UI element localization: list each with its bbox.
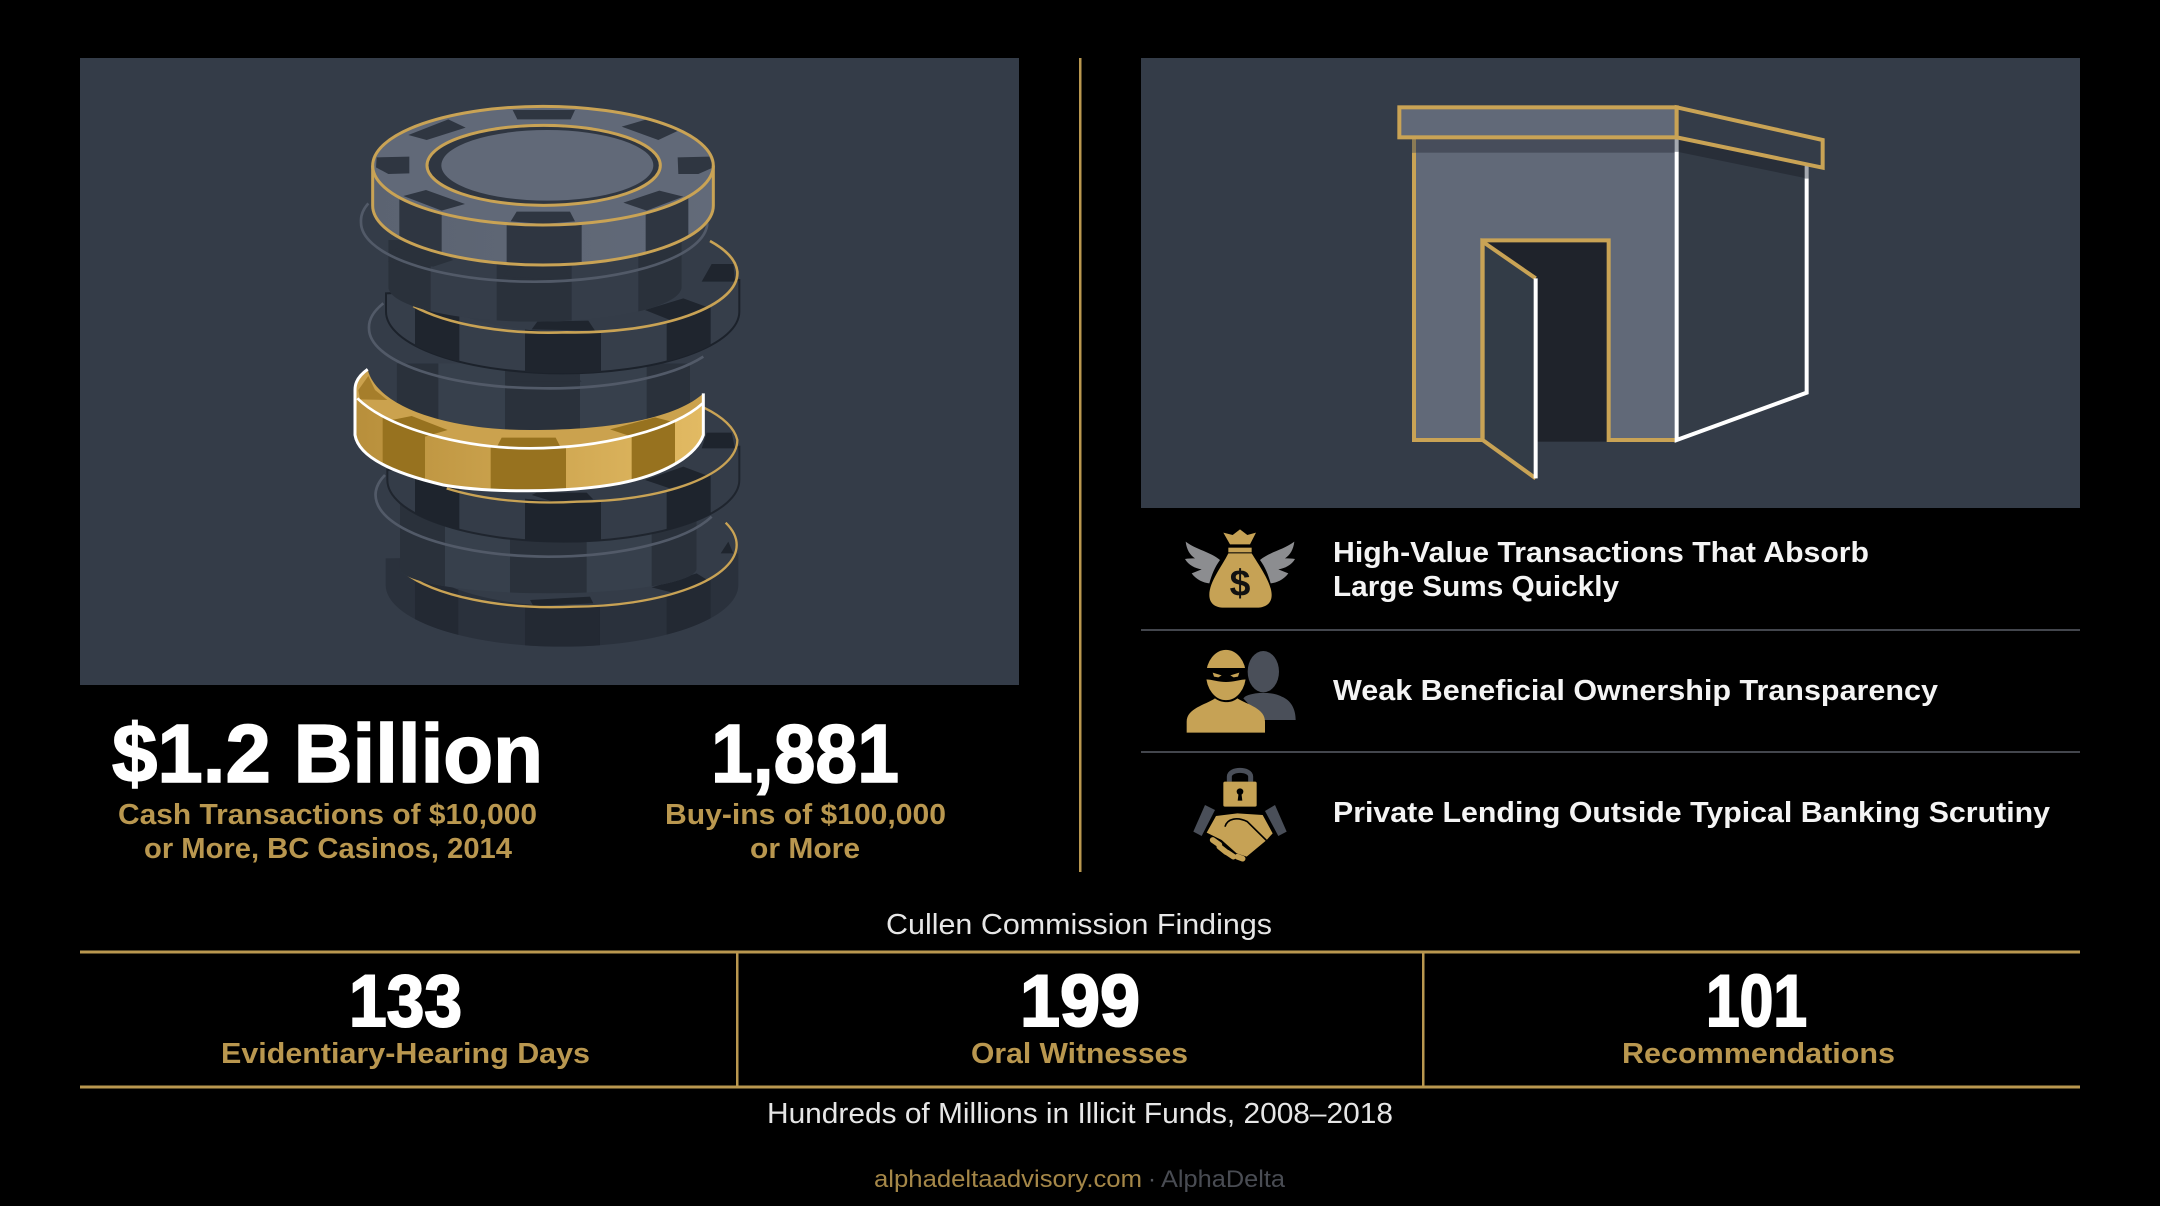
list item: beneficial ownership: Weak Beneficial Ownership Transparency bbox=[1333, 675, 1938, 707]
list item: private lending: Private Lending Outside Typical Banking Scrutiny bbox=[1333, 797, 2050, 829]
footer bbox=[874, 1166, 1286, 1193]
stat: recommendations: Recommendations bbox=[1622, 1038, 1895, 1070]
second chip bbox=[361, 203, 707, 327]
stat: hearing days bbox=[221, 961, 590, 1070]
stat: $1.2 Billion: $1.2 Billion bbox=[112, 707, 543, 800]
gold chip bbox=[355, 369, 703, 497]
stat: $1.2 Billion: Cash Transactions of $10,000 bbox=[118, 799, 537, 831]
stat: $1.2 Billion: or More, BC Casinos, 2014 bbox=[144, 833, 512, 865]
illustration: stack of casino chips with one gold chip bbox=[355, 106, 739, 653]
stat: hearing days: Evidentiary-Hearing Days bbox=[221, 1038, 590, 1070]
stat: oral witnesses bbox=[971, 961, 1188, 1070]
icon: winged money bag: $ bbox=[1230, 561, 1251, 603]
stacked chip with grey rim bbox=[376, 475, 712, 603]
top chip bbox=[373, 106, 713, 270]
chip above gold chip bbox=[368, 302, 704, 430]
bottom chip bbox=[386, 522, 738, 646]
heading: Cullen Commission Findings: Cullen Commission Findings bbox=[886, 909, 1272, 941]
list item: high-value transactions: Large Sums Quickly bbox=[1333, 571, 1619, 603]
stat: 1,881: or More bbox=[750, 833, 860, 865]
vertical divider bbox=[1079, 58, 1082, 872]
footer: AlphaDelta bbox=[1161, 1166, 1286, 1193]
icon: masked figure with shadow person bbox=[1187, 649, 1296, 733]
third chip with gold rim bbox=[385, 240, 740, 374]
stat: hearing days: 133 bbox=[349, 961, 462, 1042]
stat: $1.2 Billion bbox=[112, 707, 543, 865]
footer: alphadeltaadvisory.com bbox=[874, 1166, 1142, 1193]
stat: recommendations bbox=[1622, 961, 1895, 1070]
stat: oral witnesses: Oral Witnesses bbox=[971, 1038, 1188, 1070]
panel: casino chip stack bbox=[80, 58, 1019, 685]
footer: · bbox=[1148, 1166, 1156, 1193]
stat: 1,881: 1,881 bbox=[711, 707, 899, 800]
panel: shell company building bbox=[1141, 58, 2080, 508]
chip behind gold chip bbox=[386, 406, 740, 542]
stat: 1,881: Buy-ins of $100,000 bbox=[665, 799, 946, 831]
list item: high-value transactions bbox=[1333, 537, 1869, 603]
icon: winged money bag bbox=[1185, 529, 1295, 608]
stat: recommendations: 101 bbox=[1706, 961, 1807, 1042]
stat: oral witnesses: 199 bbox=[1020, 961, 1140, 1042]
caption: illicit funds: Hundreds of Millions in Illicit Funds, 2008–2018 bbox=[767, 1098, 1393, 1130]
stat: 1,881 bbox=[665, 707, 946, 865]
list item: high-value transactions: High-Value Transactions That Absorb bbox=[1333, 537, 1869, 569]
illustration: building with open door bbox=[1399, 107, 1823, 478]
icon: handshake with padlock bbox=[1193, 770, 1287, 859]
